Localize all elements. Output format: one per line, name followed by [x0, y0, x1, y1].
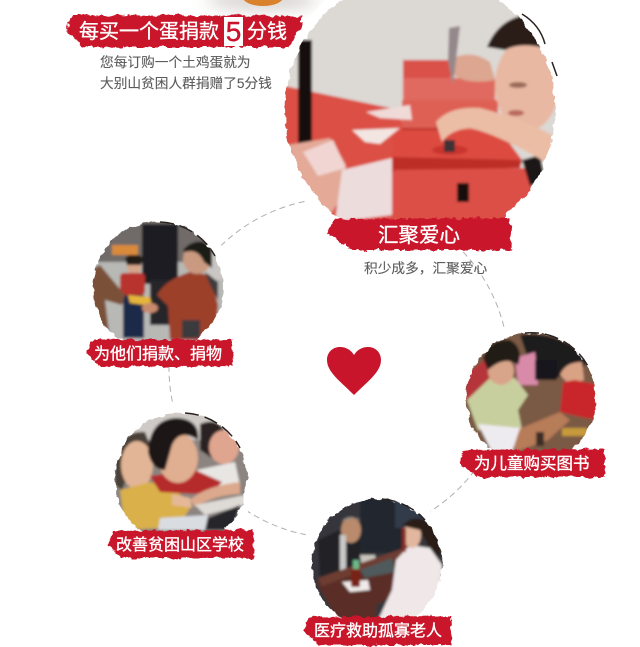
- caption banner: schools: [108, 530, 254, 558]
- photo: medical aid for elderly: [306, 498, 444, 618]
- main caption text: 汇聚爱心: [378, 224, 460, 247]
- intro text: [100, 54, 272, 91]
- heading text end: 分钱: [247, 20, 287, 43]
- intro text: 大别山贫困人群捐赠了5分钱: [100, 76, 272, 91]
- ragged edge of main photo: [280, 0, 560, 250]
- egg at top edge: [207, 0, 317, 10]
- main photo caption banner: [327, 218, 512, 250]
- caption banner: books: [459, 449, 605, 477]
- main photo: children donating money: [284, 0, 558, 220]
- photo: donating goods: [92, 221, 224, 342]
- heading banner: [66, 15, 302, 47]
- caption text: 为他们捐款、捐物: [94, 345, 222, 363]
- ragged edge: [88, 217, 228, 357]
- caption text: 改善贫困山区学校: [116, 536, 244, 554]
- highlighted number 5: 5: [226, 16, 241, 47]
- caption text: 为儿童购买图书: [474, 454, 590, 473]
- intro text: 您每订购一个土鸡蛋就为: [100, 54, 251, 70]
- heading text: 每买一个蛋捐款: [79, 20, 219, 43]
- ragged edge: [307, 494, 447, 634]
- photo: children reading books: [466, 330, 597, 452]
- photo: mountain school children: [114, 406, 248, 532]
- heart icon: [327, 347, 381, 395]
- caption text: 医疗救助孤寡老人: [314, 621, 442, 640]
- main subcaption: 积少成多，汇聚爱心: [364, 260, 488, 276]
- dashed connector ring: [169, 198, 509, 538]
- caption banner: medical aid: [304, 616, 452, 645]
- caption banner: donations: [86, 339, 233, 367]
- ragged edge: [461, 328, 601, 468]
- ragged edge: [110, 408, 252, 550]
